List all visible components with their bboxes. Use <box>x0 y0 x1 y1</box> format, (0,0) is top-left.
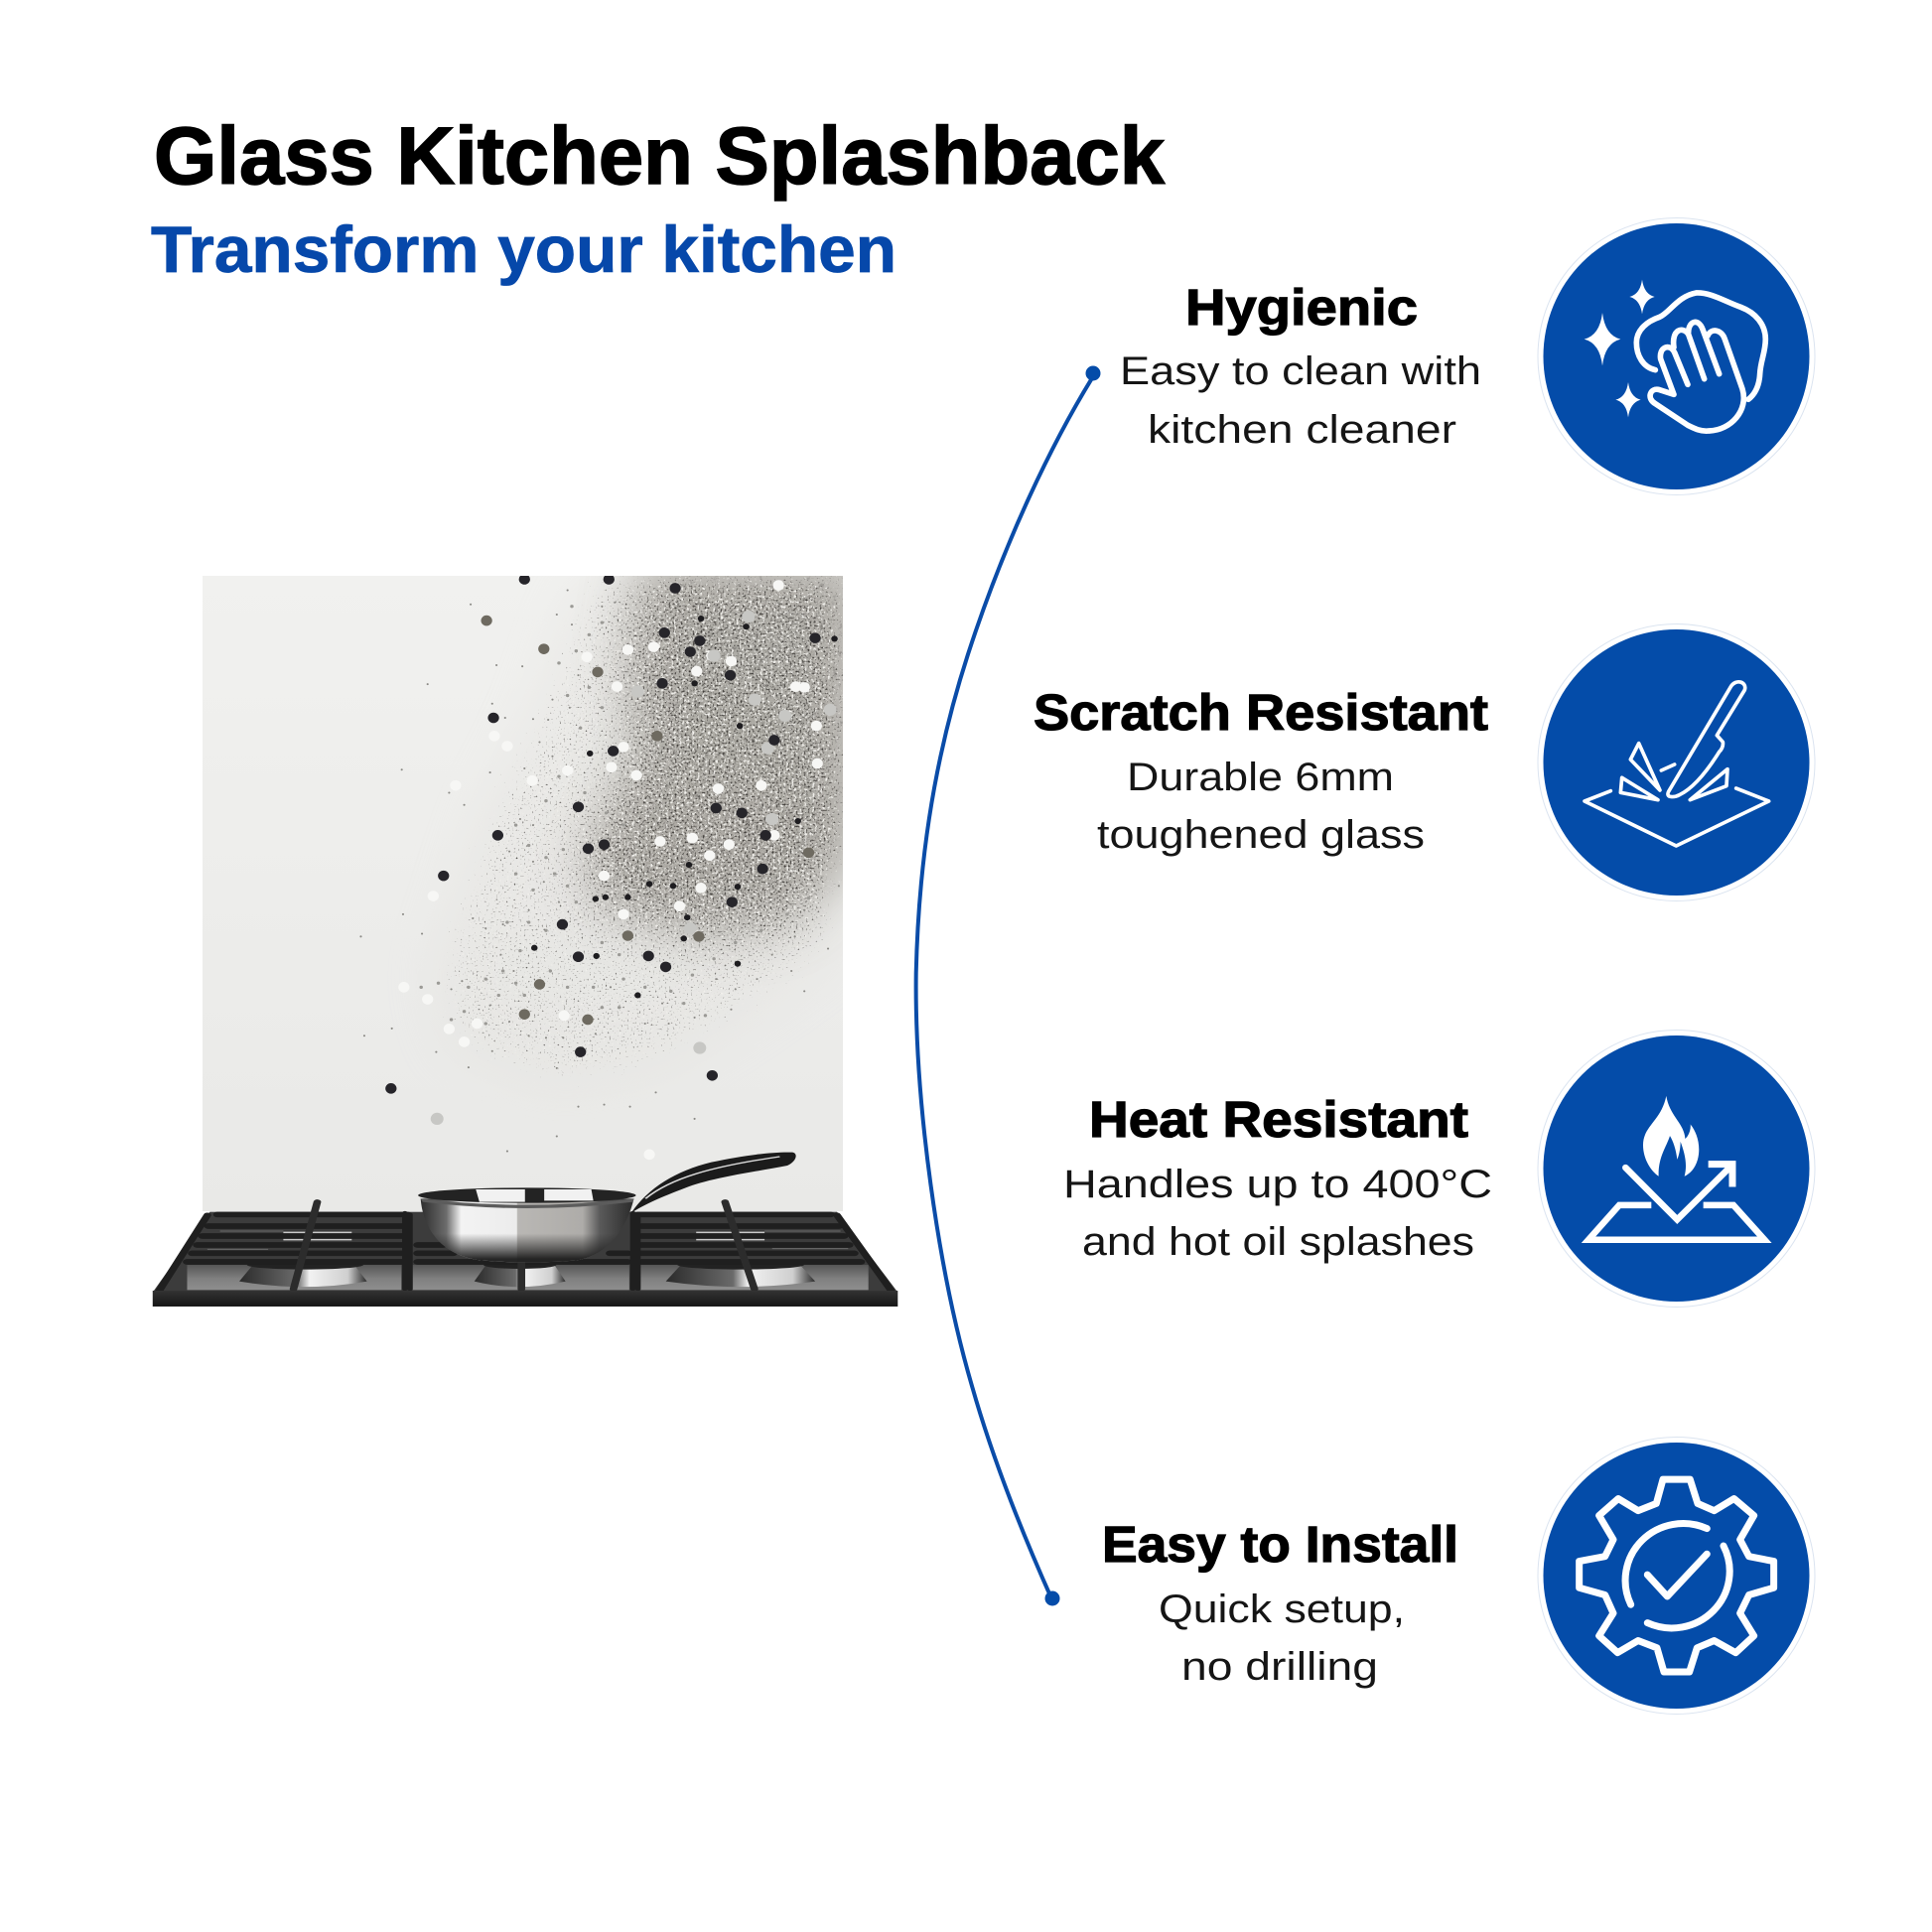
glitter splashback panel <box>203 556 864 1211</box>
description: Scratch Resistant: Durable 6mm <box>1127 756 1394 799</box>
description: Scratch Resistant: toughened glass <box>1097 813 1425 857</box>
icon: knife scratching glass <box>1538 623 1815 901</box>
subtitle: Transform your kitchen <box>151 212 897 286</box>
feature: Heat Resistant <box>1063 1091 1492 1264</box>
description: Hygienic: Easy to clean with <box>1120 349 1481 393</box>
sequins and scattered glitter <box>360 579 839 1155</box>
pan bowl <box>421 1198 633 1262</box>
heading: Scratch Resistant: Scratch Resistant <box>1034 684 1488 741</box>
title: Glass Kitchen Splashback <box>154 111 1165 202</box>
feature: Easy to Install <box>1102 1516 1458 1689</box>
product image: splashback with hob and pan <box>153 556 897 1307</box>
icon: gear with check mark <box>1538 1438 1815 1714</box>
pan handle <box>631 1153 796 1213</box>
feature: Scratch Resistant <box>1034 684 1488 857</box>
feature: Hygienic <box>1120 279 1481 452</box>
connector curve with end dots <box>916 365 1100 1606</box>
description: Easy to Install: Quick setup, <box>1159 1587 1405 1631</box>
heading: Easy to Install: Easy to Install <box>1102 1516 1458 1573</box>
description: Easy to Install: no drilling <box>1181 1645 1378 1689</box>
description: Hygienic: kitchen cleaner <box>1148 408 1456 452</box>
hob with pan <box>153 1153 897 1307</box>
icon: hand wiping with sparkles <box>1538 218 1815 494</box>
description: Heat Resistant: and hot oil splashes <box>1082 1220 1474 1264</box>
heading: Heat Resistant: Heat Resistant <box>1089 1091 1468 1148</box>
icon: flame over deflecting surface <box>1538 1031 1815 1307</box>
heading: Hygienic: Hygienic <box>1185 279 1418 336</box>
description: Heat Resistant: Handles up to 400°C <box>1063 1163 1492 1206</box>
